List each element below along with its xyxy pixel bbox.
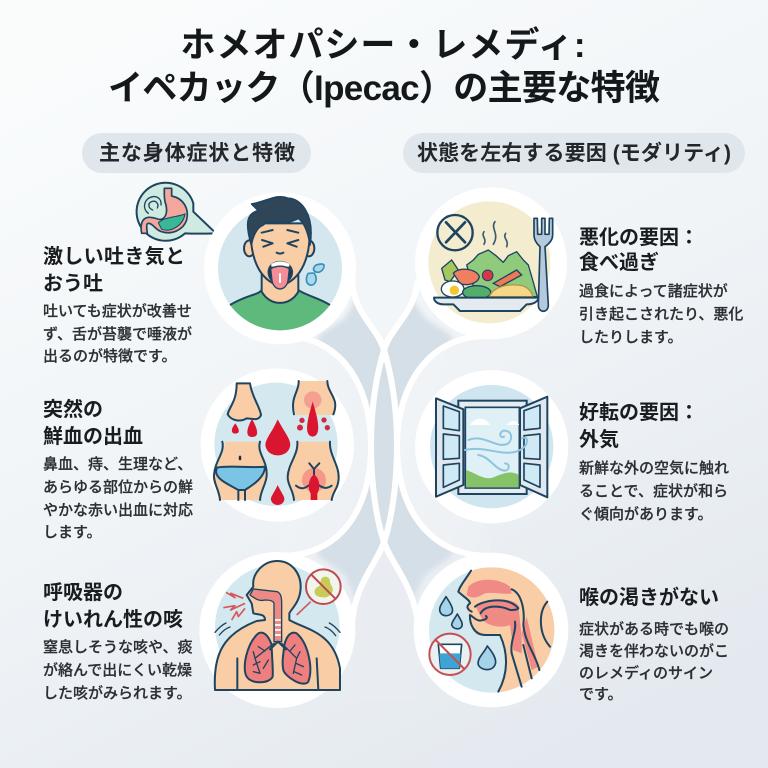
text block: overeating description: 過食によって諸症状が [579, 282, 728, 300]
text block: cough heading: 呼吸器の [43, 581, 123, 604]
text block: overeating heading: 食べ過ぎ [579, 250, 659, 274]
text block: bleeding heading [43, 397, 143, 448]
text block: nausea heading: 激しい吐き気と [43, 245, 185, 268]
text block: no thirst description [579, 620, 729, 703]
text block: fresh air description: 新鮮な外の空気に触れ [579, 460, 729, 477]
text block: overeating heading [579, 226, 699, 274]
text block: fresh air description [579, 460, 729, 523]
text block: overeating description [579, 282, 743, 346]
title: イペカック（Ipecac）の主要な特徴 [108, 69, 660, 108]
icon: overloaded plate and fork [415, 187, 567, 339]
panel: spasmodic cough [43, 552, 355, 708]
text block: bleeding description: やかな赤い出血に対応 [43, 502, 193, 519]
text block: cough heading: けいれん性の咳 [43, 608, 183, 631]
text block: bleeding description [43, 455, 193, 541]
text block: cough description: した咳がみられます。 [43, 684, 192, 702]
heading pill: left column [82, 133, 311, 173]
text block: bleeding description: します。 [43, 524, 102, 541]
text block: no thirst heading: 喉の渇きがない [579, 585, 719, 609]
title [108, 25, 660, 108]
text block: nausea heading: おう吐 [43, 272, 103, 295]
heading pill: right column [403, 133, 745, 173]
text block: bleeding description: あらゆる部位からの鮮 [43, 479, 193, 496]
text block: overeating description: したりします。 [579, 329, 683, 346]
text block: no thirst description: 渇きを伴わないのがこ [579, 642, 729, 660]
text block: no thirst description: のレメディのサイン [579, 664, 713, 682]
text block: bleeding heading: 突然の [43, 397, 103, 421]
icon: bleeding body parts [201, 368, 354, 522]
text block: fresh air description: ぐ傾向があります。 [579, 505, 713, 523]
panel: no thirst [414, 553, 729, 707]
text block: fresh air heading: 好転の要因： [579, 401, 699, 424]
icon: respiratory system [199, 552, 355, 708]
icon: man with tongue out [204, 192, 356, 344]
text block: overeating heading: 悪化の要因： [579, 226, 699, 249]
text block: nausea heading [43, 245, 185, 295]
text block: cough heading [43, 581, 183, 631]
panel: nausea and vomiting [43, 183, 356, 365]
text block: cough description [43, 638, 193, 702]
heading pill: right column: 状態を左右する要因 (モダリティ) [417, 141, 731, 165]
text block: no thirst description: 症状がある時でも喉の [579, 620, 729, 638]
text block: overeating description: 引き起こされたり、悪化 [579, 306, 743, 323]
text block: bleeding heading: 鮮血の出血 [43, 425, 143, 448]
text block: cough description: 窒息しそうな咳や、痰 [43, 638, 193, 656]
text block: nausea description: 吐いても症状が改善せ [43, 302, 192, 320]
panel: overeating [415, 187, 743, 346]
text block: fresh air heading [579, 401, 699, 451]
icon: open window with breeze [415, 370, 568, 523]
text block: fresh air description: ることで、症状が和ら [579, 482, 728, 500]
text block: nausea description: ず、舌が苔襲で唾液が [43, 325, 192, 343]
icon: throat cross-section with crossed water glass [414, 553, 568, 707]
panel: fresh air [415, 370, 729, 523]
text block: nausea description: 出るのが特徴です。 [43, 347, 177, 365]
text block: cough description: が絡んで出にくい乾燥 [43, 661, 192, 679]
text block: bleeding description: 鼻血、痔、生理など、 [43, 455, 192, 473]
icon: stomach speech bubble [137, 183, 216, 241]
title: ホメオパシー・レメディ: [180, 25, 586, 65]
connector: central flowing lines [280, 200, 490, 700]
text block: fresh air heading: 外気 [579, 428, 619, 451]
heading pill: left column: 主な身体症状と特徴 [99, 142, 295, 165]
text block: no thirst description: です。 [579, 686, 623, 703]
text block: nausea description [43, 302, 192, 365]
panel: bright red bleeding [43, 368, 354, 541]
